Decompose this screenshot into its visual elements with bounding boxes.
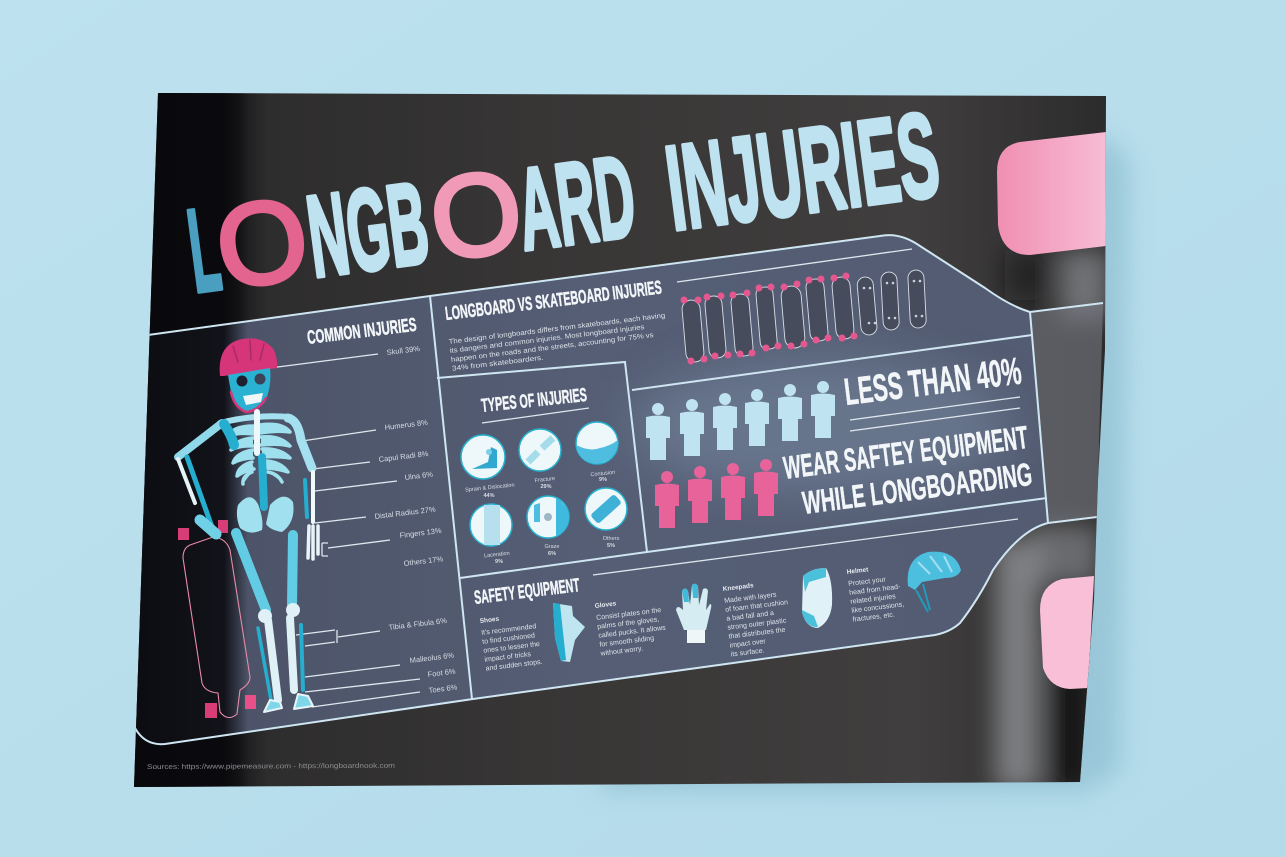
text: helmet: Protect your: [848, 576, 887, 588]
text: kneepads: Made with layers: [724, 591, 777, 605]
poster sheet: [130, 87, 1110, 790]
text: helmet: related injuries: [850, 593, 897, 606]
icon: helmet: [908, 552, 961, 612]
right leg: [292, 535, 293, 606]
rib cage: [229, 424, 290, 484]
title: NGB: [300, 157, 435, 302]
icon: bandage: [585, 488, 627, 530]
injury labels: Tibia & Fibula 6%: [388, 616, 448, 632]
deck tail panel: [1030, 303, 1103, 523]
category labels: 5%: [607, 543, 615, 549]
icon: contusion: [576, 422, 618, 464]
skull: [228, 368, 270, 412]
category labels: Others: [603, 536, 619, 542]
left fold shadow: [130, 90, 248, 790]
heading: common injuries: COMMON INJURIES: [306, 315, 418, 349]
deck highlight: [630, 355, 1010, 495]
paragraph: 34% from skateboarders.: [452, 355, 544, 373]
injury labels: Malleolus 6%: [409, 651, 455, 665]
text: helmet: fractures, etc.: [852, 612, 895, 624]
icon: laceration: [470, 504, 512, 546]
text: shoes: [479, 611, 543, 673]
text: shoes: impact of tricks: [484, 651, 532, 664]
category labels: 29%: [540, 484, 552, 490]
panel: types of injuries: [461, 385, 627, 565]
stat: less than 40%: LESS THAN 40%: [842, 351, 1024, 414]
text: helmet: head from head-: [849, 584, 901, 597]
wheel bottom: [1040, 576, 1094, 689]
injury labels: Skull 39%: [386, 344, 421, 357]
heading: safety equipment: SAFETY EQUIPMENT: [473, 575, 581, 609]
text: kneepads: Kneepads: [722, 582, 754, 593]
category labels: Contusion: [590, 470, 616, 478]
callout lines: [270, 354, 420, 707]
deck outline and dividers: [135, 235, 1103, 744]
shoulders: [220, 416, 290, 423]
spine and sternum: [262, 457, 264, 507]
text: gloves: Consist plates on the: [596, 607, 662, 622]
icon: kneepad: [802, 568, 832, 628]
text: shoes: to find cushioned: [482, 632, 535, 646]
text: gloves: called pucks. It allows: [598, 625, 667, 640]
title letter L: L: [181, 183, 227, 318]
paragraph: happen on the roads and the streets, accounting for 75% vs: [451, 332, 654, 364]
category labels: 9%: [599, 477, 607, 483]
text: kneepads: strong outer plastic: [727, 617, 787, 632]
category labels: Fracture: [534, 476, 555, 484]
text: kneepads: impact over: [729, 638, 767, 650]
title: ARD: [510, 131, 642, 275]
skeleton: [178, 338, 318, 712]
panel: safety statistic: [646, 351, 1034, 528]
panel: safety equipment: [473, 552, 961, 673]
helmet: [220, 338, 277, 376]
pictogram: pink riders: [655, 459, 778, 528]
board silhouettes: [681, 270, 927, 363]
pelvis: [237, 497, 294, 533]
paragraph: The design of longboards differs from skateboards, each having: [448, 312, 666, 346]
injury labels: Capul Radi 8%: [378, 449, 429, 464]
title word INJURIES: INJURIES: [659, 87, 946, 256]
longboard deck panel: [135, 235, 1048, 744]
injury labels: [374, 344, 458, 695]
stat: while longboarding: WHILE LONGBOARDING: [800, 456, 1034, 521]
text: gloves: for smooth sliding: [599, 635, 655, 649]
category labels: Graze: [545, 544, 559, 550]
injury labels: Toes 6%: [428, 683, 458, 695]
injury labels: Foot 6%: [427, 667, 456, 679]
text: kneepads: of foam that cushion: [725, 599, 788, 614]
injury labels: Others 17%: [403, 554, 444, 568]
source footer: Sources: https://www.pipemeasure.com - https://longboardnook.com: [147, 763, 395, 771]
icon: glove: [676, 584, 711, 643]
pictogram: blue riders: [646, 381, 835, 460]
text: shoes: Shoes: [479, 616, 500, 625]
category labels: Sprain & Dislocation: [465, 482, 515, 494]
title letter O pink 2: O: [423, 145, 529, 285]
text: helmet: [846, 563, 906, 624]
category labels: Laceration: [484, 551, 510, 559]
category labels: 44%: [483, 493, 495, 499]
injury labels: Fingers 13%: [399, 526, 442, 540]
heading: types of injuries: TYPES OF INJURIES: [480, 385, 588, 417]
text: gloves: Gloves: [594, 600, 617, 610]
text: gloves: palms of the gloves,: [597, 616, 660, 631]
panel: longboard vs skateboard: [444, 270, 927, 373]
text: helmet: Helmet: [846, 566, 870, 576]
category labels: 6%: [548, 551, 556, 557]
text: shoes: and sudden stops.: [485, 659, 543, 673]
title letter O pink: O: [209, 173, 315, 313]
text: kneepads: its surface.: [730, 647, 765, 658]
text: kneepads: a bad fall and a: [726, 610, 775, 623]
paragraph: its dangers and common injuries. Most longboard injuries: [449, 324, 645, 355]
category labels: [465, 470, 619, 565]
injury labels: Distal Radius 27%: [374, 505, 436, 521]
skateboard truck bolts: [863, 280, 923, 324]
text: shoes: It's recommended: [481, 623, 537, 637]
icon: sprain: [461, 435, 505, 479]
board wheels: [680, 272, 858, 364]
right arm: [288, 418, 312, 468]
injury labels: Humerus 8%: [384, 418, 429, 432]
stat: wear safety equipment: WEAR SAFTEY EQUIPMENT: [781, 419, 1030, 486]
icon: shoe: [553, 603, 585, 662]
wheel top: [997, 132, 1106, 255]
left arm: [178, 423, 222, 457]
category labels: 9%: [495, 559, 503, 565]
text: gloves: without worry.: [599, 645, 643, 658]
icon: graze: [527, 496, 569, 538]
longboard outline: [178, 520, 256, 718]
title: [186, 112, 939, 294]
panel: common injuries: [178, 315, 458, 718]
injury labels: Ulna 6%: [404, 470, 434, 482]
paragraph: [448, 312, 669, 373]
text: shoes: ones to lessen the: [483, 641, 540, 655]
icon: fracture: [519, 429, 561, 471]
text: helmet: like concussions,: [851, 601, 905, 615]
text: kneepads: [722, 578, 794, 658]
paper glare: [995, 250, 1110, 790]
text: gloves: [593, 595, 669, 658]
text: kneepads: that distributes the: [728, 627, 786, 641]
poster shadow: [600, 130, 1130, 792]
left leg: [236, 533, 266, 610]
heading: longboard vs skateboard injuries: LONGBOARD VS SKATEBOARD INJURIES: [444, 278, 663, 325]
